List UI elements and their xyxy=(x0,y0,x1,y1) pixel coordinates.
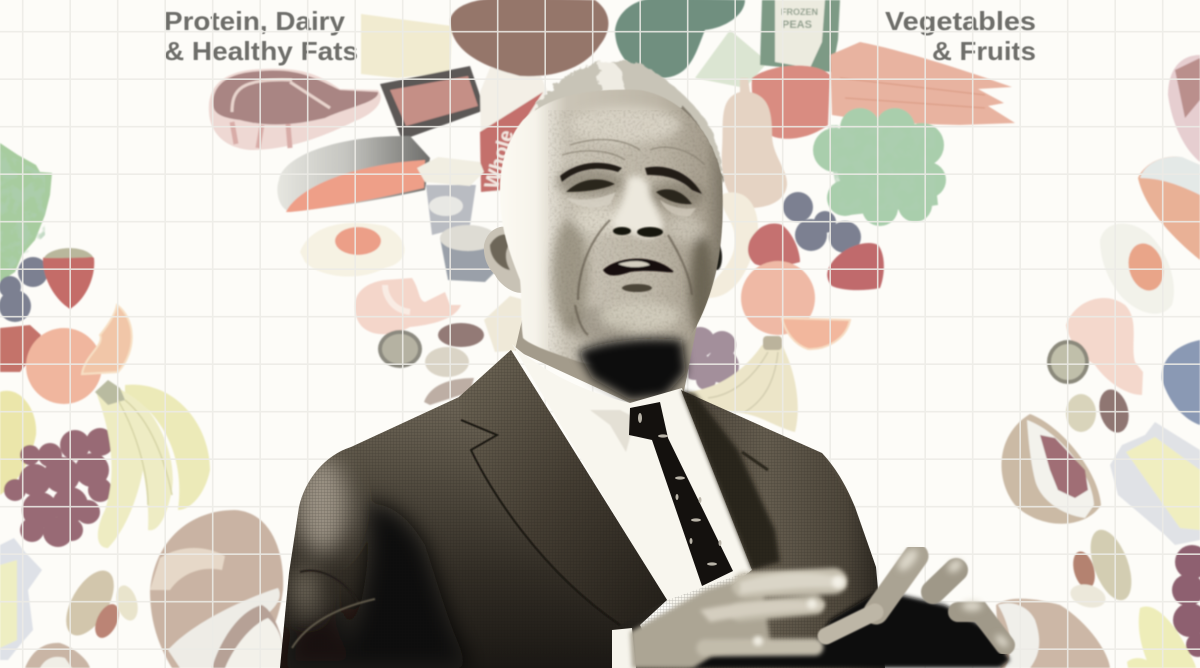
food illustrations: protein, dairy and fats column xyxy=(209,0,608,405)
icon: strawberries xyxy=(748,224,884,290)
icon: bread roll piece xyxy=(484,296,525,352)
icon: almond xyxy=(438,323,484,347)
icon: bread left bottom xyxy=(25,643,90,668)
icon: bananas left xyxy=(95,380,210,548)
icon: cheese block xyxy=(361,14,452,78)
shirt collar shading xyxy=(590,410,632,452)
icon: strawberry left xyxy=(43,248,94,309)
portrait: man in suit speaking xyxy=(280,61,1010,668)
icon: cheese left xyxy=(0,538,42,660)
icon: egg right xyxy=(1100,224,1174,314)
icon: packaged ground meat xyxy=(380,66,485,140)
icon: grapes left xyxy=(4,428,114,547)
icon: almonds right xyxy=(1068,524,1140,611)
forehead wrinkles xyxy=(562,140,705,165)
icon: tomato xyxy=(752,65,830,139)
dark area under hands xyxy=(687,590,1010,668)
icon: fried egg xyxy=(300,223,405,277)
section heading: protein, dairy and healthy fats: & Healthy Fats xyxy=(164,36,358,66)
icon: apple left xyxy=(0,325,41,372)
icon: broccoli xyxy=(615,0,745,78)
icon: chicken or potato xyxy=(450,0,608,76)
icon: pear xyxy=(0,391,36,495)
icon: bread right xyxy=(996,599,1110,668)
icon: walnut xyxy=(378,330,422,368)
icon: blueberries left xyxy=(0,257,48,322)
icon: tin can xyxy=(440,225,497,282)
icon: grapes xyxy=(680,327,739,390)
icon: orange left xyxy=(26,328,102,404)
icon: carrots xyxy=(830,42,1015,125)
icon: frozen peas bag xyxy=(760,0,840,72)
left lapel xyxy=(459,350,667,625)
section heading: protein, dairy and healthy fats xyxy=(164,6,358,66)
icon: shrimp right xyxy=(1066,298,1143,395)
hair xyxy=(528,61,723,185)
right hand fingers xyxy=(826,556,1005,645)
right hand highlights xyxy=(895,546,1010,649)
icon: yogurt cup xyxy=(417,157,484,235)
icon: cashew xyxy=(425,347,469,377)
head and face xyxy=(500,90,723,366)
icon: banana right xyxy=(1127,606,1196,668)
shirt xyxy=(512,344,757,625)
tie dots xyxy=(638,413,722,566)
nasolabial folds xyxy=(575,220,692,335)
jacket weave xyxy=(280,340,890,668)
jacket body xyxy=(280,350,667,668)
icon: salmon right xyxy=(1138,157,1200,260)
sleeve shadows xyxy=(280,340,890,668)
mouth xyxy=(603,259,674,292)
icon: lettuce xyxy=(813,108,946,226)
icon: whole milk carton: Whole xyxy=(481,128,518,191)
icon: butternut squash xyxy=(722,78,787,208)
icon: orange slice left xyxy=(82,305,132,374)
icon: bananas xyxy=(688,336,798,432)
icon: walnut right xyxy=(1047,340,1089,384)
ear xyxy=(484,226,526,293)
face shading and light patches xyxy=(546,105,718,359)
icon: shrimp xyxy=(355,278,461,334)
section heading: vegetables and fruits: & Fruits xyxy=(932,36,1036,66)
icon: steak right xyxy=(1168,55,1200,162)
right edge food cluster xyxy=(996,55,1200,668)
necktie xyxy=(629,402,733,586)
jacket right side xyxy=(620,390,885,668)
left edge food cluster xyxy=(0,143,285,668)
icon: lettuce left xyxy=(0,143,52,282)
eyes xyxy=(566,179,696,216)
under chin shadow xyxy=(578,338,686,400)
left hand and shirt cuff xyxy=(612,572,845,668)
icon: frozen peas bag: FROZEN xyxy=(781,7,818,17)
neck xyxy=(515,310,700,404)
icon: cheese right xyxy=(1110,422,1200,545)
lapel edges xyxy=(461,420,620,625)
icon: nuts right xyxy=(1066,386,1133,436)
icon: nuts left xyxy=(56,563,141,643)
icon: can right xyxy=(1162,340,1200,425)
right lapel shadow xyxy=(681,390,780,570)
icon: blueberries xyxy=(783,192,861,253)
section heading: vegetables and fruits xyxy=(885,6,1036,66)
icon: leafy stalk xyxy=(695,30,768,88)
icon: orange slice xyxy=(782,318,850,349)
icon: frozen peas bag: PEAS xyxy=(782,19,812,31)
icon: orange xyxy=(741,261,815,335)
icon: brown nut xyxy=(424,378,474,405)
section heading: vegetables and fruits: Vegetables xyxy=(885,6,1036,36)
eyebrows xyxy=(560,163,702,194)
section heading: protein, dairy and healthy fats: Protein, Dairy xyxy=(164,6,346,36)
right pocket slit xyxy=(742,452,768,470)
icon: whole milk carton xyxy=(480,62,547,192)
icon: coconut half xyxy=(1001,414,1101,524)
icon: steak xyxy=(209,69,381,150)
food illustrations: vegetables and fruits column xyxy=(615,0,1015,432)
icon: bread loaf xyxy=(150,510,285,668)
sleeve fold highlights xyxy=(292,571,375,648)
nose xyxy=(612,176,664,237)
right ear shadow xyxy=(712,244,722,270)
icon: grapes right xyxy=(1172,545,1200,657)
icon: cream fruit xyxy=(708,192,758,298)
icon: salmon fillet xyxy=(277,136,430,212)
